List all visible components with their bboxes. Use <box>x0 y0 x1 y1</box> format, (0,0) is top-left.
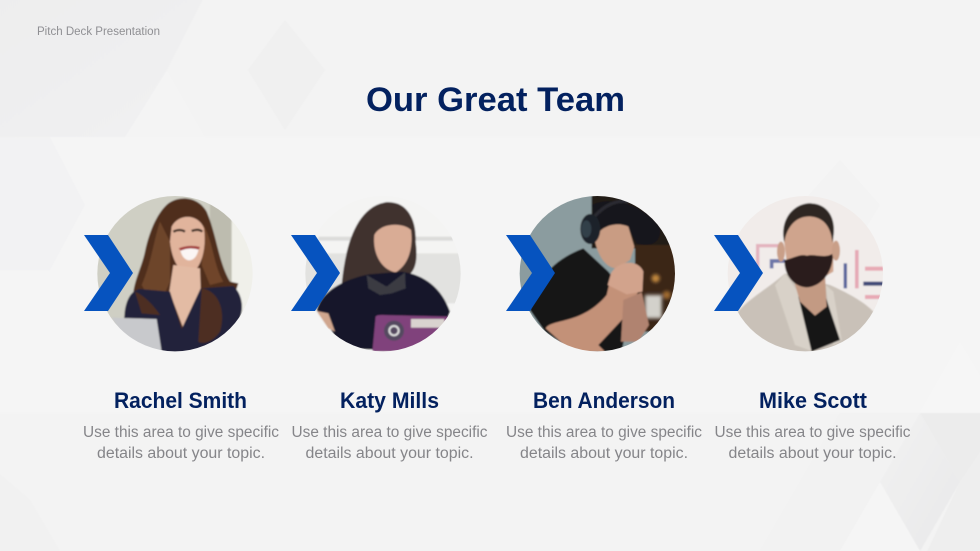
chevron: Rachel Smith <box>84 235 133 311</box>
name: Ben Anderson: Ben Anderson <box>533 388 675 413</box>
description: Katy Mills: details about your topic. <box>306 445 474 462</box>
photo: Rachel Smith <box>97 196 252 352</box>
name: Katy Mills: Katy Mills <box>340 388 439 413</box>
description: Rachel Smith: Use this area to give specific <box>83 424 279 441</box>
description: Katy Mills <box>292 424 488 462</box>
photo: Katy Mills <box>306 201 460 352</box>
description: Ben Anderson <box>506 424 702 462</box>
header label: Pitch Deck Presentation <box>37 26 160 38</box>
title: Our Great Team <box>366 81 625 119</box>
chevron: Mike Scott <box>714 235 763 311</box>
photo: Ben Anderson <box>520 196 675 352</box>
photo: Mike Scott <box>728 196 883 352</box>
team member: Mike Scott <box>714 192 911 462</box>
description: Mike Scott: details about your topic. <box>728 445 896 462</box>
description: Mike Scott <box>714 424 911 462</box>
chevron: Katy Mills <box>291 235 340 311</box>
chevron: Ben Anderson <box>506 235 555 311</box>
description: Katy Mills: Use this area to give specific <box>292 424 488 441</box>
name: Rachel Smith: Rachel Smith <box>114 388 247 413</box>
description: Mike Scott: Use this area to give specific <box>714 424 911 441</box>
team member: Rachel Smith <box>83 192 279 462</box>
description: Ben Anderson: details about your topic. <box>520 445 688 462</box>
team member: Katy Mills <box>291 192 488 462</box>
description: Ben Anderson: Use this area to give specific <box>506 424 702 441</box>
description: Rachel Smith: details about your topic. <box>97 445 265 462</box>
team member: Ben Anderson <box>506 192 702 462</box>
name: Mike Scott: Mike Scott <box>759 388 868 413</box>
description: Rachel Smith <box>83 424 279 462</box>
